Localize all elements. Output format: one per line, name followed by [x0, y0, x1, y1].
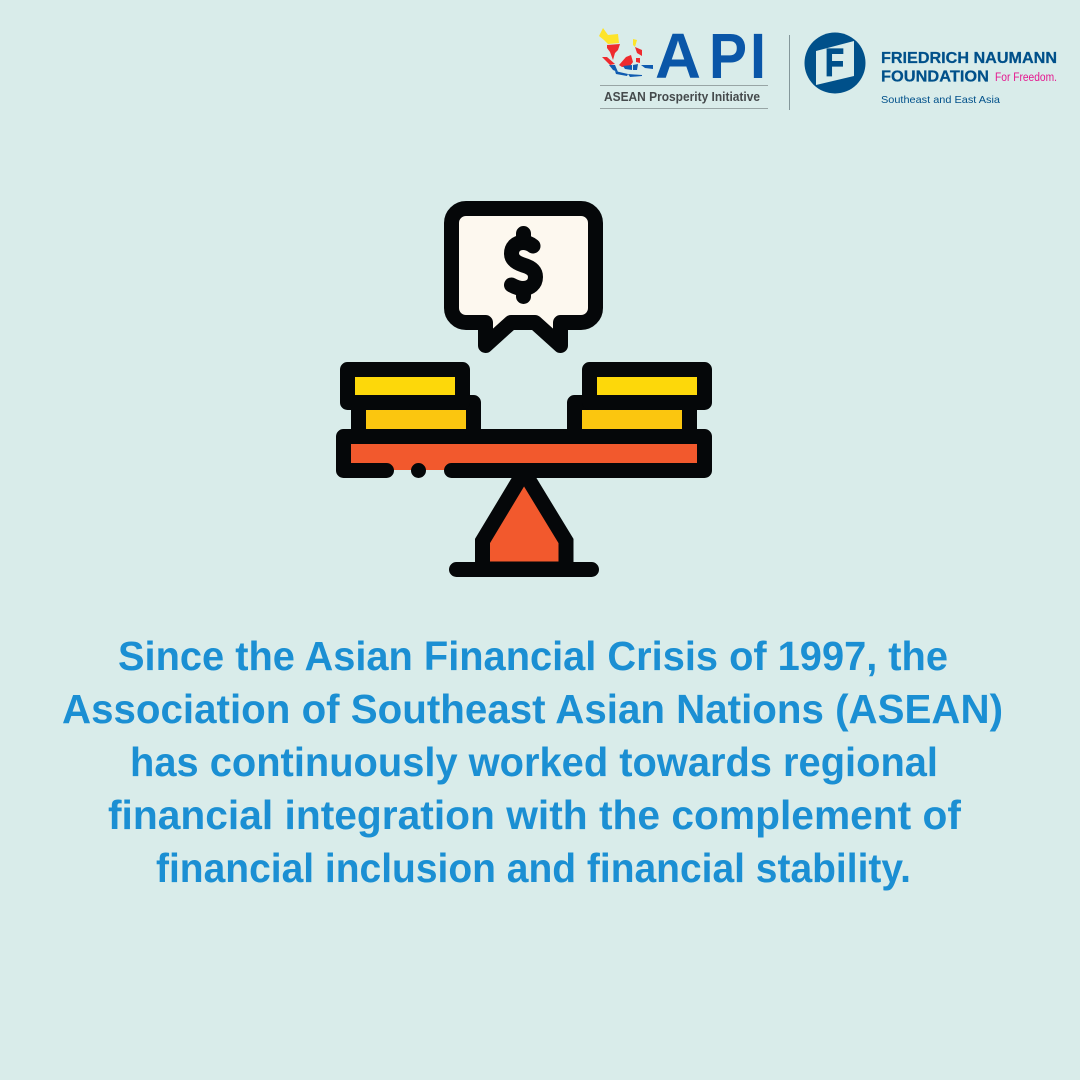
- logo wordmark: API: [655, 20, 766, 92]
- main statement text: has continuously worked towards regional: [130, 739, 938, 785]
- icon: balance scale with coins and dollar speech bubble: [344, 208, 704, 570]
- logo: Friedrich Naumann Foundation: FOUNDATION: [881, 68, 989, 86]
- slogan: For Freedom.: [995, 72, 1057, 84]
- main statement text: financial integration with the complement of: [108, 792, 961, 838]
- right coin stack: [574, 370, 704, 436]
- left coin stack: [348, 370, 474, 436]
- logo: Friedrich Naumann Foundation: [804, 32, 1057, 106]
- icon: FNF emblem: F: [825, 42, 844, 85]
- main statement text: Since the Asian Financial Crisis of 1997, the: [118, 633, 948, 679]
- logo: ASEAN Prosperity Initiative: [599, 20, 768, 108]
- icon: speech bubble with dollar sign: [452, 208, 596, 346]
- region label: Southeast and East Asia: [881, 94, 1000, 106]
- logo wordmark: API: I: [750, 20, 766, 92]
- scale beam: [344, 436, 704, 478]
- scale fulcrum: [456, 472, 592, 570]
- main statement text: financial inclusion and financial stability.: [156, 845, 911, 891]
- main statement text: Association of Southeast Asian Nations (ASEAN): [62, 686, 1003, 732]
- icon: Southeast Asia map: [599, 28, 653, 77]
- main statement text: [62, 633, 1003, 891]
- foundation name: FRIEDRICH NAUMANN: [881, 50, 1057, 67]
- logo tagline: ASEAN Prosperity Initiative: [604, 90, 760, 104]
- logo wordmark: API: A: [655, 20, 701, 92]
- logo wordmark: API: P: [709, 20, 747, 92]
- icon: FNF emblem: [804, 32, 866, 94]
